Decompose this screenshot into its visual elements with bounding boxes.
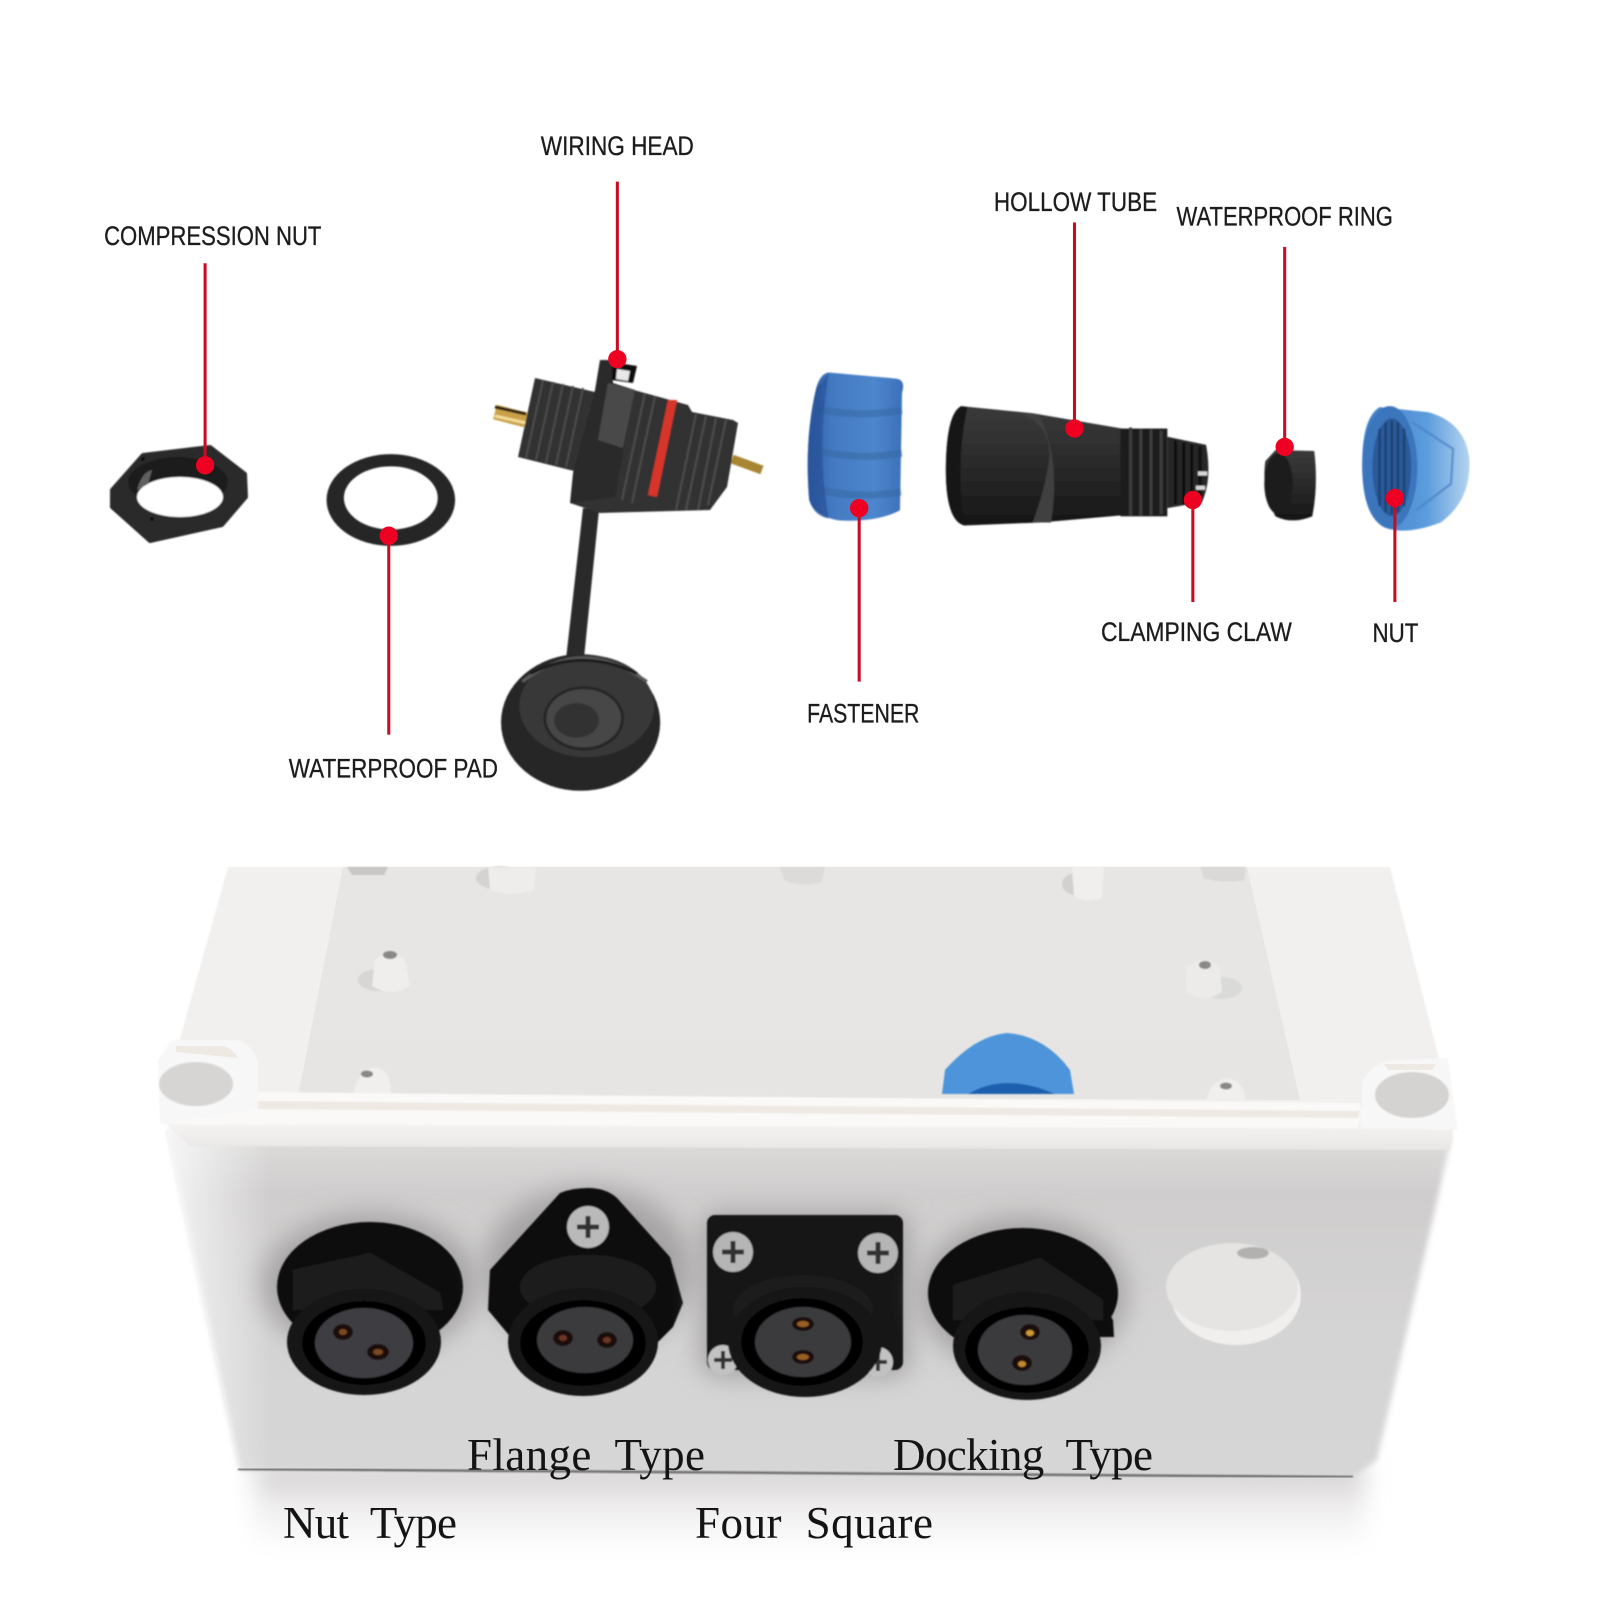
connector: nut type	[262, 1213, 478, 1395]
part: hollow tube and clamping claw	[946, 406, 1208, 526]
label: flange type: Flange Type	[467, 1430, 705, 1480]
part: wiring head with cap	[495, 360, 762, 791]
part: waterproof pad	[327, 454, 455, 546]
ground shadow under box	[255, 1465, 1365, 1550]
label: docking type: Docking Type	[893, 1430, 1153, 1480]
callout: clamping claw: CLAMPING CLAW	[1101, 617, 1292, 647]
callout: clamping claw	[1101, 491, 1292, 647]
label: four square: Four Square	[695, 1498, 933, 1548]
callout: waterproof ring	[1177, 202, 1393, 456]
protective cap	[501, 654, 660, 791]
callout: compression nut	[104, 221, 321, 474]
part: compression nut	[112, 447, 246, 541]
connector body	[518, 378, 612, 475]
callout: fastener	[807, 499, 919, 728]
connector: four square	[700, 1212, 910, 1397]
callout: hollow tube: HOLLOW TUBE	[994, 187, 1157, 217]
callout: compression nut: COMPRESSION NUT	[104, 221, 321, 251]
corner lugs	[158, 1040, 258, 1124]
strap	[565, 508, 599, 668]
base line	[238, 1469, 1353, 1477]
callout: hollow tube	[994, 187, 1157, 438]
panel: junction box with mounted connectors	[158, 866, 1458, 1550]
blue cap inside box	[942, 1033, 1074, 1094]
rim	[160, 1108, 1453, 1150]
box front face	[158, 1040, 1458, 1477]
label: nut type: Nut Type	[283, 1498, 457, 1548]
part: fastener	[808, 372, 903, 521]
callouts with leader lines	[104, 131, 1418, 784]
part: waterproof ring	[1264, 450, 1316, 520]
gold pins	[495, 412, 526, 420]
floor posts	[354, 951, 1246, 1100]
callout: wiring head: WIRING HEAD	[541, 131, 694, 161]
connector: flange type	[483, 1188, 693, 1396]
callout: nut	[1372, 489, 1418, 648]
part: nut	[1362, 406, 1470, 531]
box interior and walls	[160, 866, 1452, 1110]
callout: wiring head	[541, 131, 694, 368]
callout: nut: NUT	[1372, 618, 1418, 648]
callout: waterproof pad	[289, 527, 498, 784]
callout: fastener: FASTENER	[807, 698, 919, 728]
panel: exploded connector parts	[104, 131, 1470, 791]
callout: waterproof pad: WATERPROOF PAD	[289, 754, 498, 784]
empty knock-out hole	[1166, 1243, 1301, 1345]
callout: waterproof ring: WATERPROOF RING	[1177, 202, 1393, 232]
connector: docking type	[919, 1217, 1127, 1400]
